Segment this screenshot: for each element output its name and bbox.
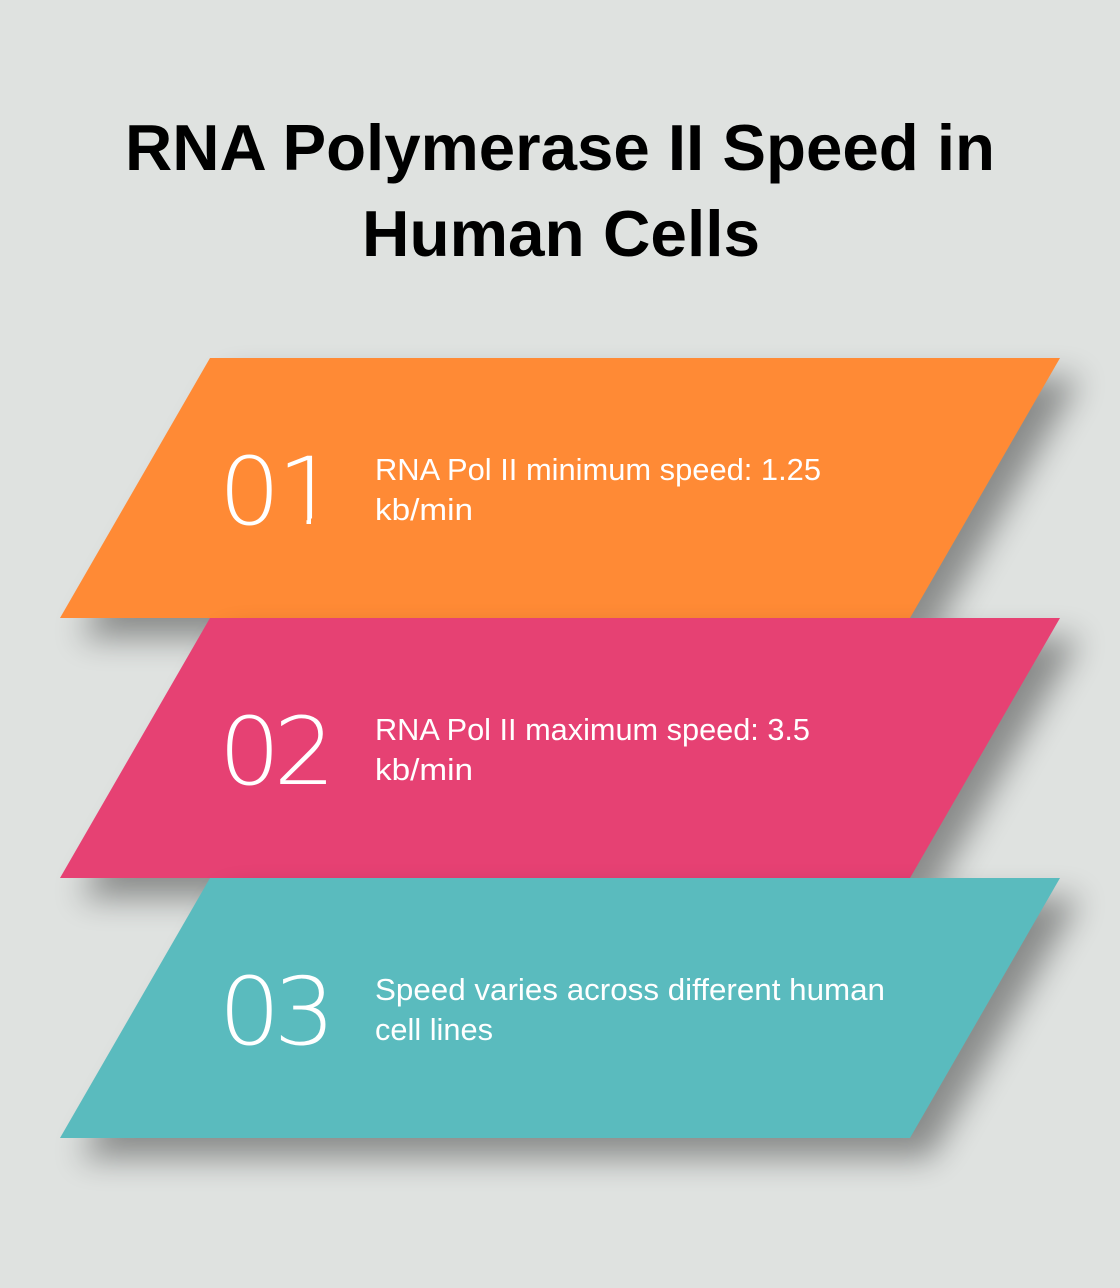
text: step 2 description: RNA Pol II maximum speed: 3.5 <box>375 712 810 747</box>
text: step 3 description: Speed varies across different human <box>375 972 885 1007</box>
text: step 1 description: kb/min <box>375 492 473 527</box>
title: RNA Polymerase II Speed in <box>125 111 995 184</box>
number 03: 3 <box>274 957 336 1067</box>
number 03 <box>218 957 336 1067</box>
number 02: 0 <box>218 697 281 807</box>
panel: step 2 <box>60 618 1080 898</box>
number 03: 0 <box>218 957 281 1067</box>
panel: step 3 <box>60 878 1080 1158</box>
number 01 <box>227 454 312 526</box>
text: step 1 description: RNA Pol II minimum speed: 1.25 <box>375 452 821 487</box>
text: step 1 description <box>375 452 821 527</box>
text: step 3 description: cell lines <box>375 1012 493 1047</box>
number 01: 1 <box>277 437 339 547</box>
title: Human Cells <box>362 197 760 270</box>
text: step 2 description <box>375 712 810 787</box>
text: step 3 description <box>375 972 885 1047</box>
number 02: 2 <box>274 697 336 807</box>
panel: step 1 <box>60 358 1080 638</box>
number 01: 0 <box>218 437 281 547</box>
text: step 2 description: kb/min <box>375 752 473 787</box>
number 02 <box>218 697 336 807</box>
title <box>125 111 995 270</box>
